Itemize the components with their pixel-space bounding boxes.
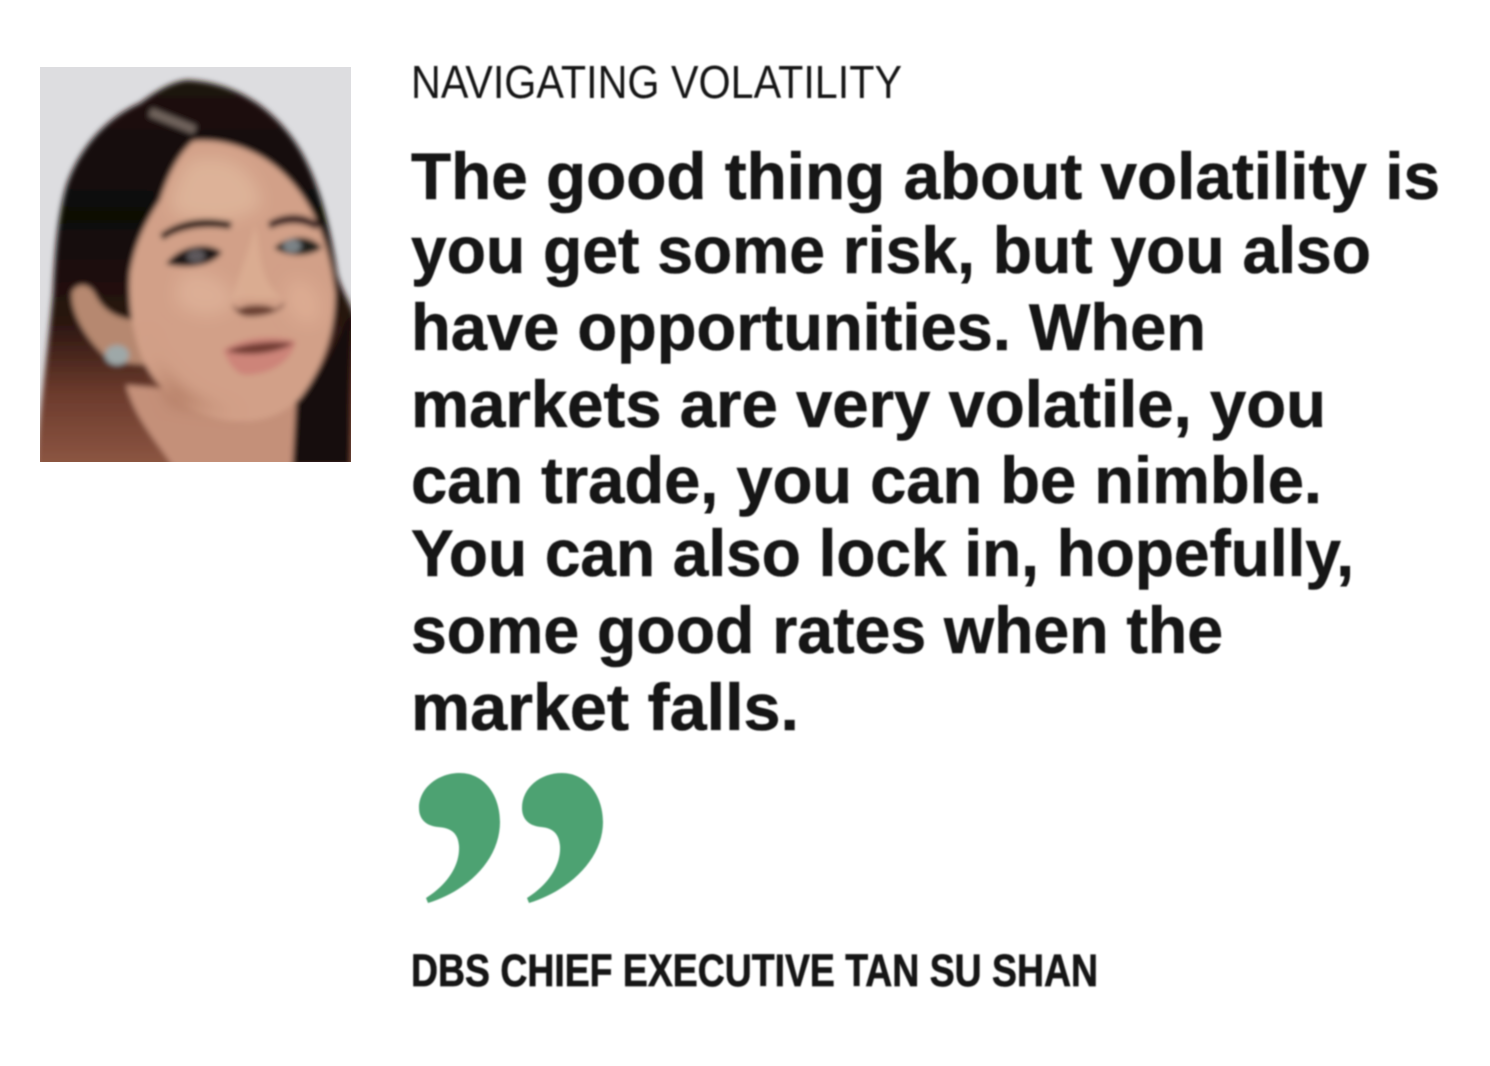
attribution: DBS CHIEF EXECUTIVE TAN SU SHAN <box>411 945 1098 996</box>
quote text: markets are very volatile, you <box>411 367 1326 441</box>
quote text: have opportunities. When <box>411 290 1206 364</box>
nose <box>238 239 274 297</box>
quote text <box>411 139 1440 744</box>
quote text: can trade, you can be nimble. <box>411 443 1322 517</box>
eyebrows <box>160 219 232 240</box>
portrait photo <box>36 67 356 470</box>
kicker heading: NAVIGATING VOLATILITY <box>411 56 902 108</box>
quote text: market falls. <box>411 670 799 744</box>
face <box>130 141 335 421</box>
neck <box>126 385 296 470</box>
hair <box>36 80 356 470</box>
quote text: The good thing about volatility is <box>411 139 1440 213</box>
quote text: some good rates when the <box>411 593 1223 667</box>
quote text: You can also lock in, hopefully, <box>411 516 1354 590</box>
icon: closing quotation marks <box>419 773 603 903</box>
quote text: you get some risk, but you also <box>411 213 1371 287</box>
ear and earring <box>72 285 150 365</box>
mouth <box>223 337 296 375</box>
eyes <box>166 246 222 267</box>
